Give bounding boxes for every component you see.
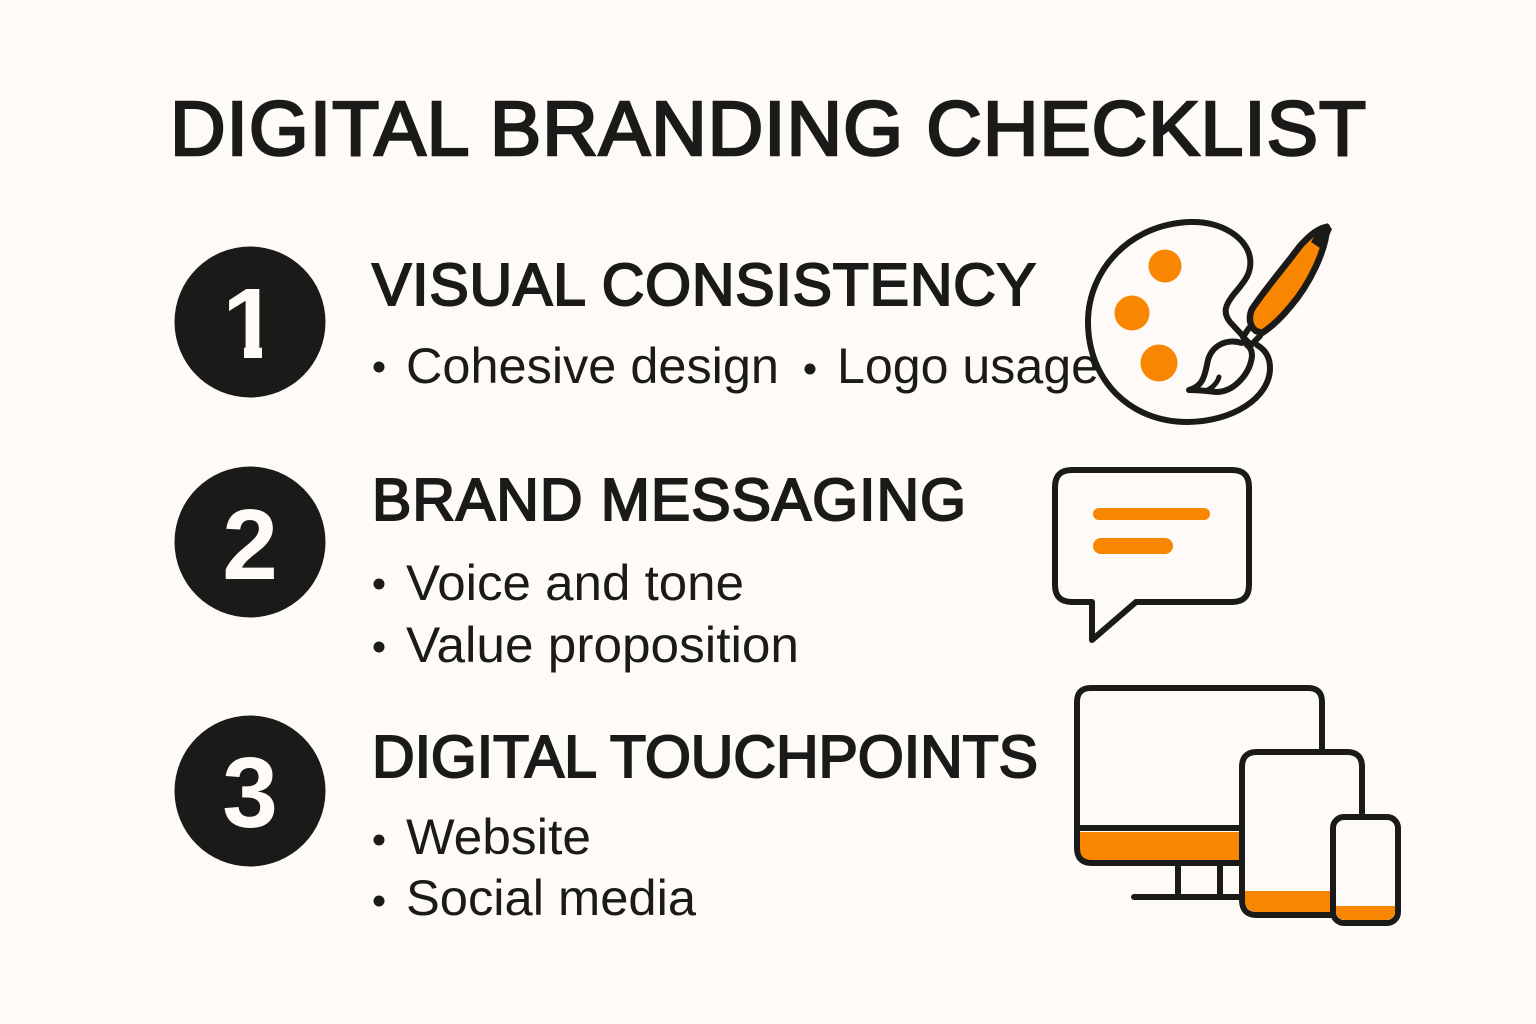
monitor: [1077, 688, 1322, 897]
bullet list: cohesive design, logo usage: Cohesive design: [406, 338, 779, 394]
number badge 1: [174, 246, 326, 398]
heading: visual consistency: VISUAL CONSISTENCY: [372, 252, 1036, 318]
bullet list: voice and tone, value proposition: Value proposition: [406, 617, 799, 673]
phone: [1333, 817, 1398, 923]
title: DIGITAL BRANDING CHECKLIST: [170, 86, 1366, 172]
bullet list: cohesive design, logo usage: Logo usage: [837, 338, 1099, 394]
number badge 2: 2: [222, 489, 278, 601]
heading: brand messaging: BRAND MESSAGING: [372, 467, 966, 533]
bullet list: voice and tone, value proposition: Voice and tone: [406, 555, 744, 611]
tablet: [1242, 752, 1362, 915]
section 2: brand messaging: [174, 466, 1249, 673]
number badge 1: 1: [222, 268, 278, 380]
bullet list: cohesive design, logo usage: [374, 338, 1099, 394]
icon: monitor, tablet and phone: [1077, 688, 1398, 923]
bullet list: website, social media: Social media: [406, 870, 696, 926]
bullet list: website, social media: [374, 809, 696, 926]
bullet list: voice and tone, value proposition: [374, 555, 799, 673]
icon: palette and brush: [1088, 222, 1332, 422]
bullet list: website, social media: Website: [406, 809, 591, 865]
number badge 3: [174, 716, 326, 866]
icon: speech bubble: [1055, 470, 1249, 640]
heading: digital touchpoints: DIGITAL TOUCHPOINTS: [372, 724, 1038, 790]
section 1: visual consistency: [174, 222, 1332, 422]
section 3: digital touchpoints: [174, 688, 1398, 926]
number badge 3: 3: [222, 737, 278, 849]
number badge 2: [174, 466, 326, 618]
